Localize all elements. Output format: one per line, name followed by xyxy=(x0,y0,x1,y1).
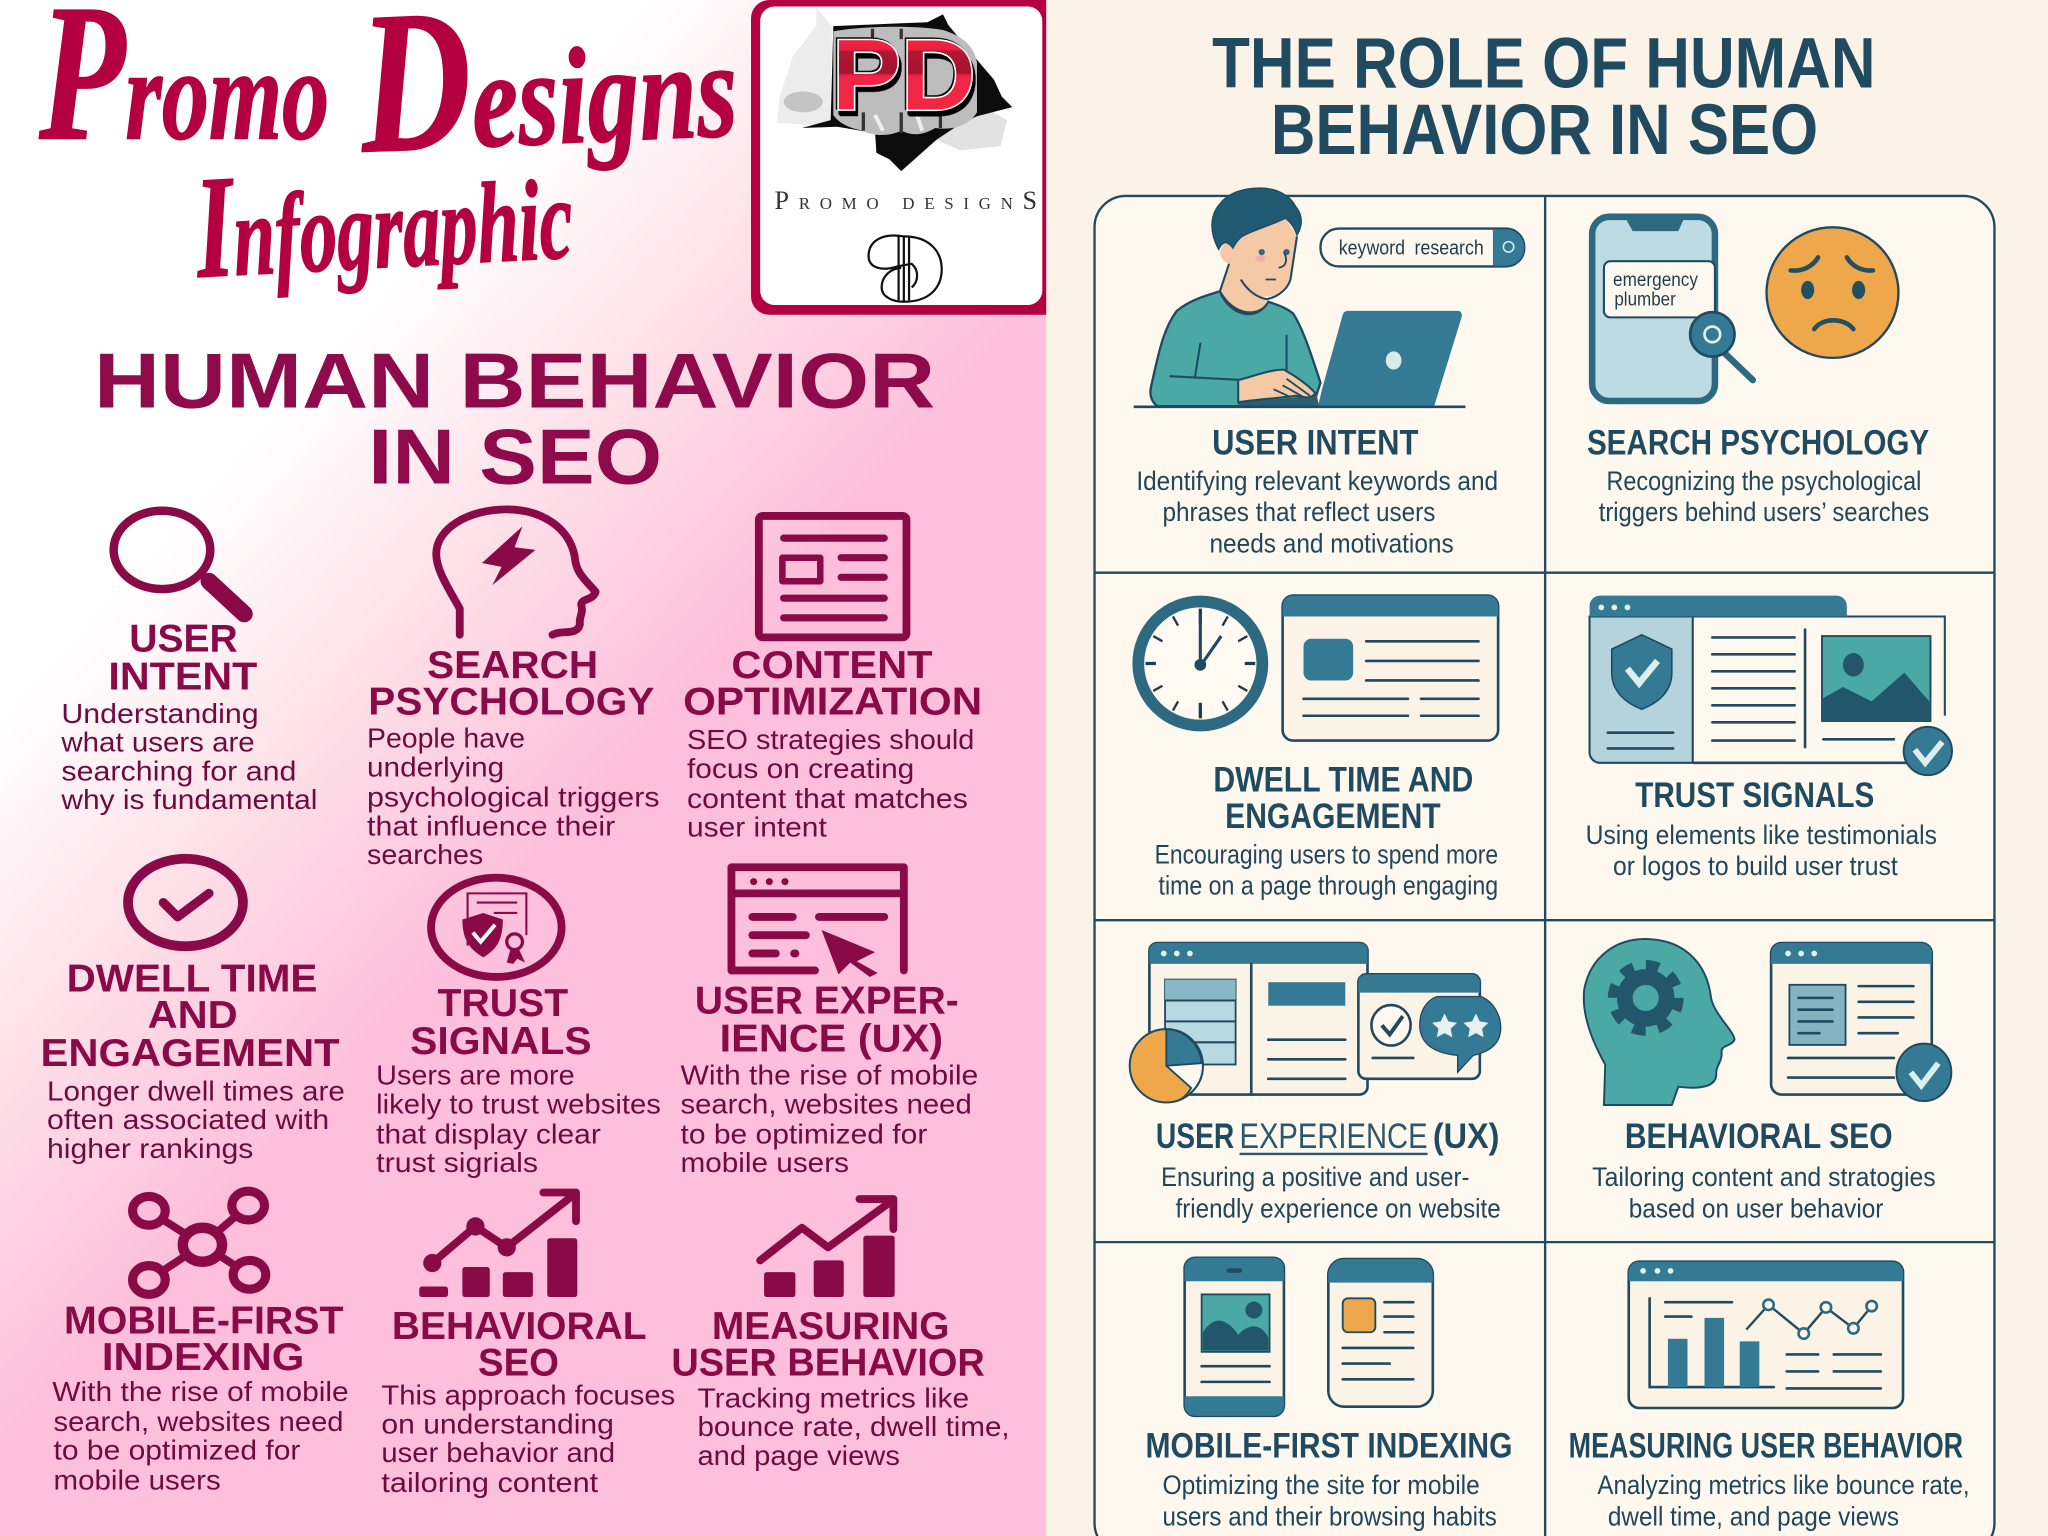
description: Recognizing the psychological xyxy=(1607,466,1921,496)
text: measuring description: and page views xyxy=(697,1440,900,1471)
text: search psychology description: that influence their xyxy=(367,810,615,841)
heading xyxy=(1156,1117,1499,1156)
heading: dwell time and engagement: AND xyxy=(148,994,238,1037)
search bar: keyword research xyxy=(1320,229,1524,266)
description xyxy=(1161,1162,1501,1223)
text: content optimization description xyxy=(687,724,974,843)
description: or logos to build user trust xyxy=(1613,851,1898,881)
icon: network nodes xyxy=(133,1191,266,1294)
heading: dwell time and engagement: DWELL TIME xyxy=(67,957,317,1000)
card: user experience xyxy=(1130,943,1501,1223)
text: dwell time description: Longer dwell times are xyxy=(47,1075,345,1106)
illustration: phone with search: emergency xyxy=(1613,269,1698,291)
logo: wordmark: P ROMO DESIGN S xyxy=(775,186,1037,215)
text: user experience description: to be optimized for xyxy=(680,1119,927,1150)
card: search psychology xyxy=(1587,217,1929,527)
icon: bar chart with rising arrow xyxy=(419,1192,577,1297)
text: dwell time description xyxy=(47,1075,345,1164)
brand subtitle: Infographic: Infographic xyxy=(190,127,576,309)
description xyxy=(1136,466,1498,558)
text: search psychology description: underlying xyxy=(367,751,504,782)
text: mobile-first description: to be optimized for xyxy=(54,1435,300,1466)
text: search psychology description: psychological triggers xyxy=(367,782,660,813)
heading: trust signals: TRUST xyxy=(438,982,568,1025)
heading: mobile-first indexing xyxy=(64,1300,344,1379)
left card: measuring user behavior xyxy=(671,1199,1010,1471)
text: user intent description: why is fundamental xyxy=(60,784,317,815)
text: measuring description xyxy=(697,1382,1010,1471)
text: measuring description: bounce rate, dwell time, xyxy=(697,1411,1010,1442)
panel: right cream background xyxy=(1046,0,2048,1536)
card: user intent xyxy=(1134,188,1524,558)
heading: measuring user behavior xyxy=(671,1305,985,1384)
heading: trust signals: SIGNALS xyxy=(410,1020,592,1063)
description: Ensuring a positive and user- xyxy=(1161,1162,1469,1192)
text: mobile-first description xyxy=(52,1376,349,1496)
text: behavioral seo description: tailoring content xyxy=(381,1467,598,1498)
left card: behavioral seo xyxy=(381,1192,675,1498)
heading: dwell time and engagement xyxy=(40,957,340,1075)
description: based on user behavior xyxy=(1629,1193,1884,1223)
text: trust signals description: that display clear xyxy=(376,1119,601,1150)
grid card frame xyxy=(1095,196,1994,1536)
heading: measuring user behavior: USER BEHAVIOR xyxy=(671,1341,985,1384)
card: measuring user behavior xyxy=(1569,1262,1970,1532)
description xyxy=(1597,1470,1970,1532)
heading: content optimization: CONTENT xyxy=(731,644,933,687)
icon: content document xyxy=(759,516,906,637)
card: trust signals xyxy=(1586,596,1952,881)
heading xyxy=(1213,761,1473,836)
description: Using elements like testimonials xyxy=(1586,820,1937,850)
left card: search psychology xyxy=(367,509,660,870)
text: dwell time description: higher rankings xyxy=(47,1133,253,1164)
illustration: phone xyxy=(1185,1258,1284,1416)
text: search psychology description xyxy=(367,723,660,870)
left card: trust signals xyxy=(376,878,661,1178)
description: Optimizing the site for mobile xyxy=(1162,1470,1480,1500)
icon: magnifying glass xyxy=(114,511,244,614)
illustration: phone with search xyxy=(1592,217,1753,401)
heading: user experience: USER EXPER- xyxy=(695,980,959,1023)
text: trust signals description xyxy=(376,1060,661,1178)
description: users and their browsing habits xyxy=(1162,1502,1497,1532)
heading: TRUST SIGNALS xyxy=(1635,776,1874,815)
left heading: IN SEO xyxy=(368,412,662,500)
heading: behavioral seo: SEO xyxy=(478,1341,559,1384)
text: search psychology description: searches xyxy=(367,839,483,870)
heading: SEARCH PSYCHOLOGY xyxy=(1587,424,1929,463)
heading: measuring user behavior: MEASURING xyxy=(712,1305,950,1348)
text: user intent description: Understanding xyxy=(61,698,259,729)
left heading xyxy=(94,337,935,500)
text: dwell time description: often associated with xyxy=(47,1104,329,1135)
icon: clock xyxy=(1138,601,1262,726)
description xyxy=(1599,466,1929,527)
icon: head with gear xyxy=(1584,939,1735,1105)
description: friendly experience on website xyxy=(1176,1193,1501,1223)
illustration: tablet xyxy=(1328,1259,1433,1407)
illustration: analytics window xyxy=(1629,1262,1903,1408)
heading: DWELL TIME AND xyxy=(1213,761,1473,800)
description: Tailoring content and stratogies xyxy=(1592,1162,1936,1192)
description: Identifying relevant keywords and xyxy=(1136,466,1498,496)
text: user intent description xyxy=(60,698,317,815)
heading: user experience: IENCE (UX) xyxy=(720,1017,943,1060)
text: trust signals description: likely to trust websites xyxy=(376,1088,661,1119)
text: content optimization description: user intent xyxy=(687,812,827,843)
heading: mobile-first indexing: INDEXING xyxy=(102,1336,304,1379)
heading: user experience xyxy=(695,980,959,1060)
heading: dwell time and engagement: ENGAGEMENT xyxy=(40,1032,340,1075)
text: content optimization description: SEO strategies should xyxy=(687,724,974,755)
description xyxy=(1592,1162,1936,1223)
text: trust signals description: Users are more xyxy=(376,1060,575,1091)
card: behavioral seo xyxy=(1584,939,1951,1223)
logo: torn fist graphic xyxy=(777,8,1012,171)
text: user experience description: mobile users xyxy=(680,1147,849,1178)
heading: behavioral seo xyxy=(392,1305,647,1384)
text: behavioral seo description: user behavior and xyxy=(381,1437,615,1468)
text: behavioral seo description: on understanding xyxy=(381,1408,614,1439)
left card: mobile-first indexing xyxy=(52,1191,349,1496)
logo: monogram xyxy=(869,235,942,302)
icon: check circle xyxy=(128,859,243,946)
icon: growth chart xyxy=(760,1199,895,1297)
heading: behavioral seo: BEHAVIORAL xyxy=(392,1305,647,1348)
heading: search psychology: SEARCH xyxy=(427,644,598,687)
heading: content optimization xyxy=(683,644,982,723)
heading: (UX) xyxy=(1433,1117,1499,1156)
icon: certificate badge xyxy=(431,878,562,977)
left heading: HUMAN BEHAVIOR xyxy=(94,337,935,425)
description: Analyzing metrics like bounce rate, xyxy=(1597,1470,1970,1500)
heading: mobile-first indexing: MOBILE-FIRST xyxy=(64,1300,344,1343)
description xyxy=(1155,839,1498,901)
description xyxy=(1162,1470,1497,1532)
text: behavioral seo description: This approach focuses xyxy=(381,1380,675,1411)
heading: search psychology: PSYCHOLOGY xyxy=(368,680,654,723)
logo box xyxy=(751,0,1046,315)
search bar: keyword research: keyword research xyxy=(1339,238,1484,260)
heading: EXPERIENCE xyxy=(1240,1117,1428,1156)
right title: BEHAVIOR IN SEO xyxy=(1271,90,1818,170)
panel: left pink background xyxy=(0,0,1046,1536)
text: mobile-first description: With the rise of mobile xyxy=(52,1376,349,1407)
description: needs and motivations xyxy=(1209,528,1454,558)
illustration: dashboard with pie and rating xyxy=(1130,943,1501,1102)
text: trust signals description: trust sigrials xyxy=(376,1147,538,1178)
heading: user intent xyxy=(108,618,257,699)
heading: MOBILE-FIRST INDEXING xyxy=(1145,1427,1512,1466)
heading: USER INTENT xyxy=(1212,424,1419,463)
heading: BEHAVIORAL SEO xyxy=(1625,1117,1893,1156)
description: dwell time, and page views xyxy=(1608,1502,1899,1532)
text: behavioral seo description xyxy=(381,1380,675,1498)
card: mobile-first indexing xyxy=(1145,1258,1512,1532)
text: user intent description: searching for and xyxy=(61,755,296,786)
description: Encouraging users to spend more xyxy=(1155,839,1498,869)
illustration: person at laptop xyxy=(1134,188,1465,407)
description xyxy=(1586,820,1937,881)
illustration: web page xyxy=(1283,596,1498,741)
heading: ENGAGEMENT xyxy=(1225,797,1441,836)
left card: dwell time xyxy=(40,859,345,1164)
text: mobile-first description: search, websites need xyxy=(54,1406,344,1437)
text: mobile-first description: mobile users xyxy=(54,1465,221,1496)
text: user intent description: what users are xyxy=(60,727,255,758)
description: triggers behind users’ searches xyxy=(1599,497,1929,527)
text: content optimization description: focus on creating xyxy=(687,753,914,784)
heading: user intent: USER xyxy=(129,618,238,661)
right title: THE ROLE OF HUMAN xyxy=(1212,24,1876,104)
heading: content optimization: OPTIMIZATION xyxy=(683,680,982,723)
icon: head with lightning bolt xyxy=(436,509,596,635)
text: content optimization description: content that matches xyxy=(687,783,968,814)
illustration: trust web page xyxy=(1590,596,1952,775)
illustration: web page with check xyxy=(1771,943,1951,1101)
left card: user intent xyxy=(60,511,317,815)
heading: trust signals xyxy=(410,982,592,1063)
icon: worried face xyxy=(1767,227,1898,358)
text: user experience description: search, websites need xyxy=(680,1088,972,1119)
description: time on a page through engaging xyxy=(1159,871,1498,901)
right title xyxy=(1212,24,1876,170)
card: dwell time and engagement xyxy=(1138,596,1498,901)
text: measuring description: Tracking metrics like xyxy=(697,1382,969,1413)
illustration: phone with search: plumber xyxy=(1614,289,1676,311)
heading: USER xyxy=(1156,1117,1234,1156)
icon: browser with cursor xyxy=(731,867,904,977)
heading: user intent: INTENT xyxy=(108,656,257,699)
logo: PD letters: PD xyxy=(832,20,976,132)
text: search psychology description: People have xyxy=(367,723,525,754)
description: phrases that reflect users xyxy=(1162,497,1435,527)
heading: search psychology xyxy=(368,644,654,723)
left card: content optimization xyxy=(683,516,982,843)
text: user experience description xyxy=(680,1060,978,1178)
text: user experience description: With the rise of mobile xyxy=(680,1060,978,1091)
left card: user experience xyxy=(680,867,978,1178)
